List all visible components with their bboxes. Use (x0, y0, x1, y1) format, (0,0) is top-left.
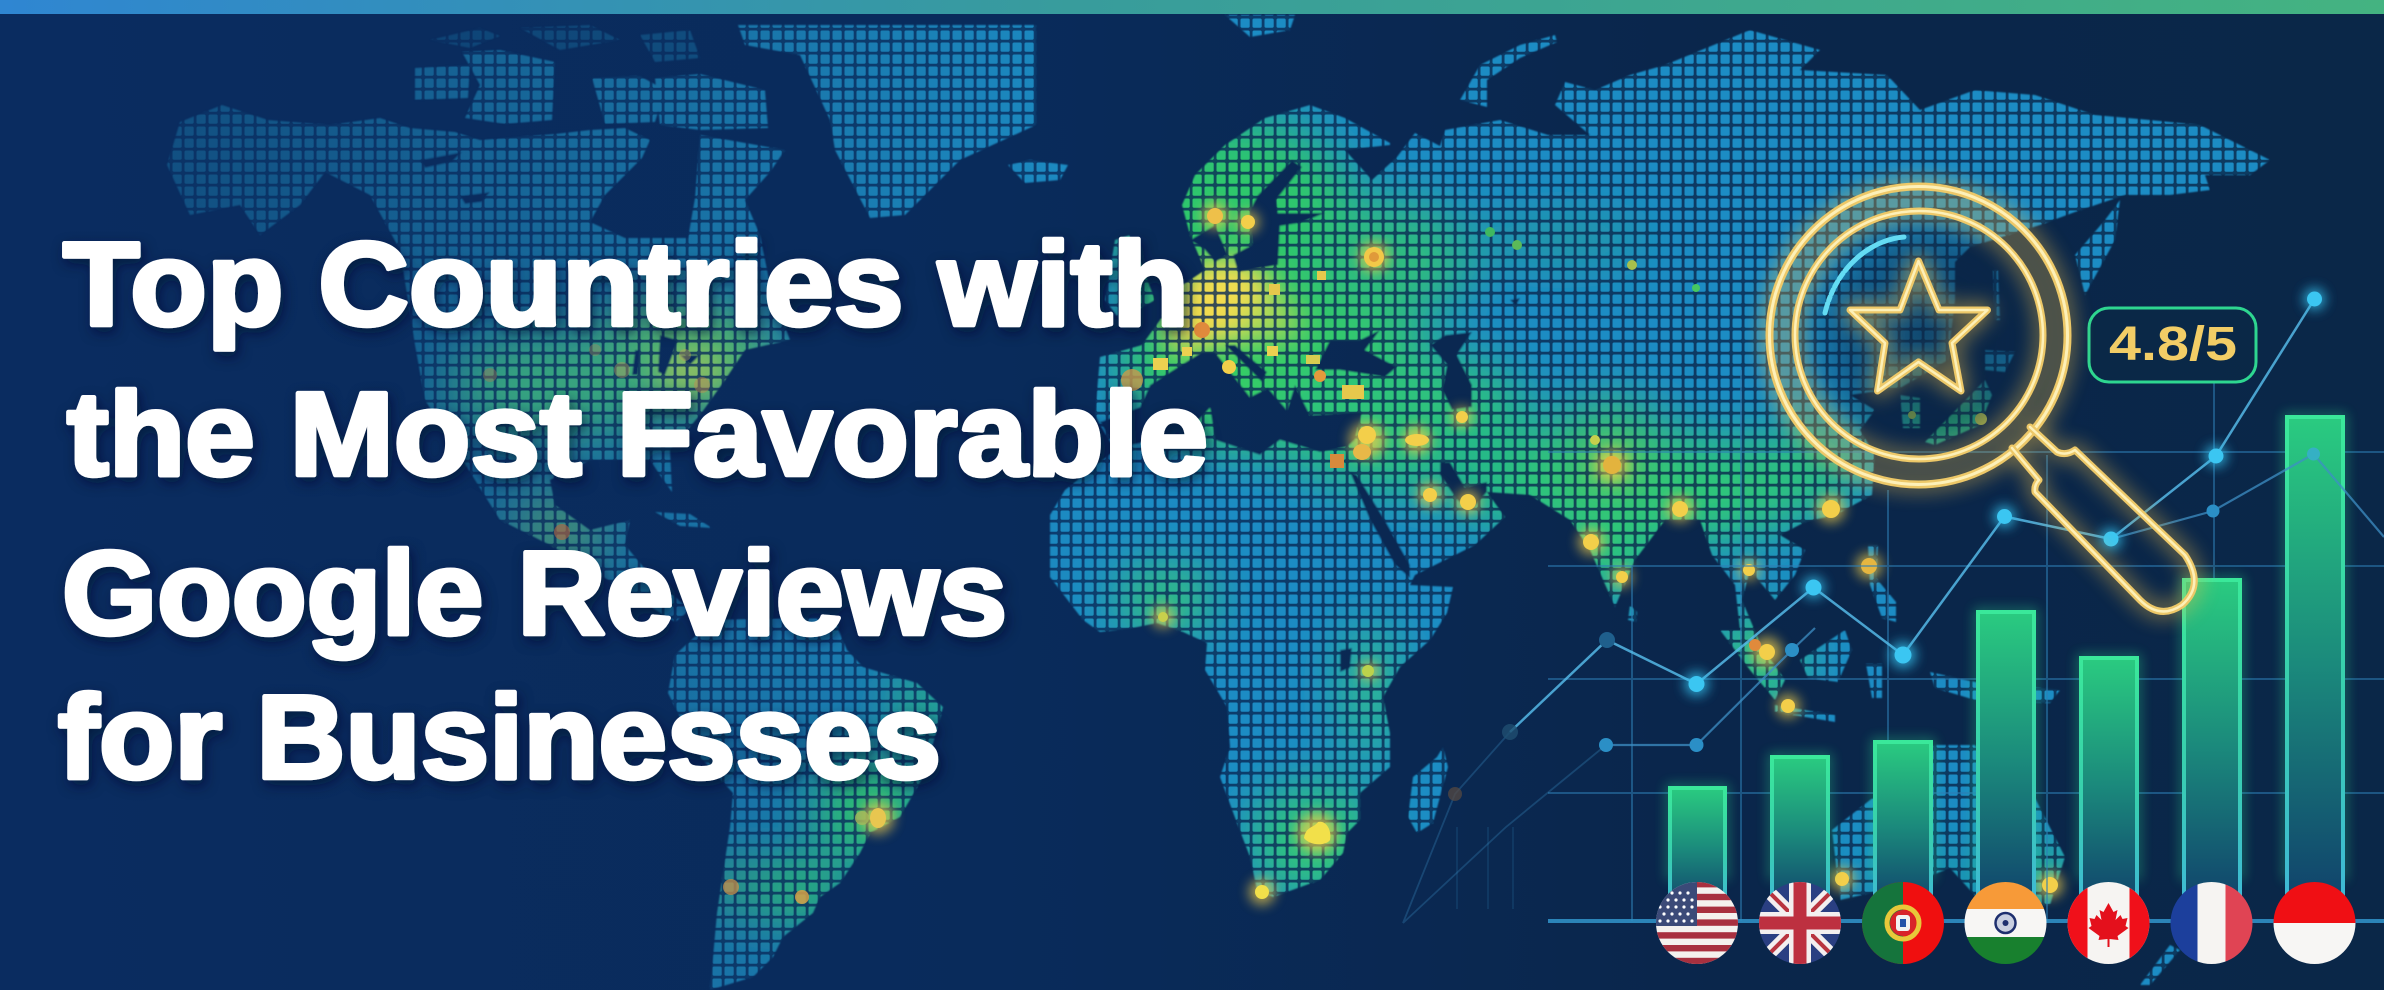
data points (1448, 288, 2326, 801)
bar 4 (1978, 612, 2034, 910)
title line 2: the Most Favorable (67, 368, 1208, 501)
lens highlight (1825, 237, 1904, 313)
flag: United States (1655, 881, 1739, 965)
bar 7 (2287, 417, 2343, 910)
chart grid (1457, 370, 2384, 921)
glow (1770, 186, 2194, 611)
faded line tails (1403, 732, 1606, 923)
flag: France (2170, 881, 2254, 965)
title line 1: Top Countries with (63, 218, 1189, 351)
flag: Canada (2066, 881, 2150, 965)
line chart (1403, 288, 2384, 923)
bar 3 (1875, 742, 1931, 910)
lens interior (1797, 213, 2041, 457)
bar 2 (1772, 757, 1828, 910)
outer ring (1770, 186, 2068, 484)
bar 6 (2184, 580, 2240, 910)
flag: Indonesia (2272, 881, 2356, 965)
flag row (1655, 881, 2356, 965)
flag: India (1964, 881, 2048, 965)
axis line (1548, 919, 2384, 923)
bar 5 (2081, 658, 2137, 910)
inner ring (1795, 211, 2043, 459)
bar chart (1670, 417, 2343, 910)
title line 3: Google Reviews (62, 527, 1007, 660)
top accent bar (0, 0, 2384, 14)
city hot spots (483, 203, 2063, 905)
secondary trend line (1606, 454, 2384, 745)
rating value: 4.8/5 (2109, 318, 2237, 371)
flag: Portugal (1861, 881, 1945, 965)
bar 1 (1670, 788, 1725, 910)
icon: star (1850, 261, 1988, 391)
title (58, 218, 1208, 804)
handle (2012, 427, 2194, 611)
flag: United Kingdom (1758, 881, 1842, 965)
bar glow (1670, 417, 2343, 880)
rating badge (2089, 308, 2256, 382)
magnifying glass icon (1770, 186, 2194, 611)
title line 4: for Businesses (58, 671, 941, 804)
primary trend line (1510, 299, 2314, 732)
